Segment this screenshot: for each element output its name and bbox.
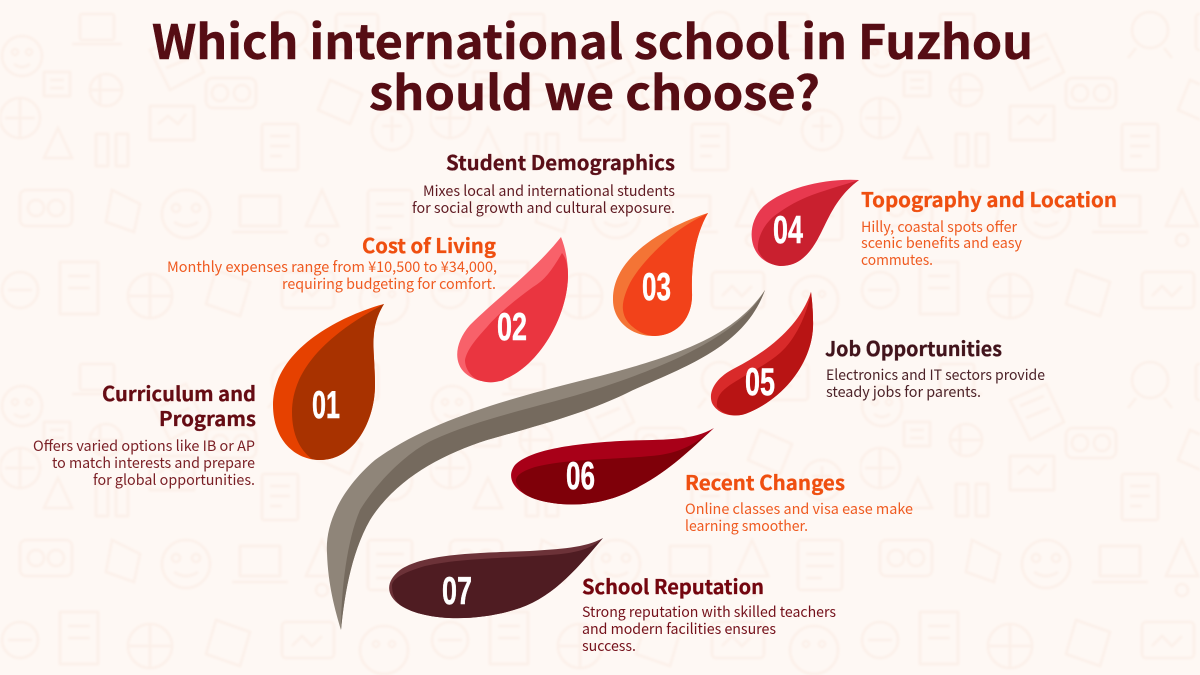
drop 04	[752, 180, 859, 266]
text: Curriculum and Programs: Programs	[159, 403, 256, 432]
drop 03: 03	[642, 266, 671, 309]
text: Cost of Living: Monthly expenses range from ¥10,500 to ¥34,000,	[167, 256, 497, 277]
text: Cost of Living: requiring budgeting for comfort.	[282, 273, 496, 294]
title: Which international school in Fuzhou	[152, 4, 1033, 73]
text: Job Opportunities: steady jobs for parents.	[826, 381, 981, 402]
text: Job Opportunities: Electronics and IT sectors provide	[826, 364, 1045, 385]
text: Topography and Location: commutes.	[861, 249, 933, 270]
text: Curriculum and Programs	[33, 378, 256, 490]
text: Student Demographics	[412, 147, 675, 218]
text: Topography and Location	[861, 184, 1117, 270]
drop 06	[511, 428, 714, 505]
text: Cost of Living: Cost of Living	[362, 230, 496, 259]
central swoosh arrow	[327, 290, 765, 630]
text: Curriculum and Programs: Offers varied options like IB or AP	[33, 435, 255, 456]
text: School Reputation: School Reputation	[582, 571, 764, 600]
text: Curriculum and Programs: Curriculum and	[102, 378, 256, 407]
text: Cost of Living	[167, 230, 497, 294]
drop 07	[389, 538, 603, 618]
text: Recent Changes: Recent Changes	[685, 467, 845, 496]
drop 01: 01	[312, 384, 340, 427]
text: School Reputation: success.	[582, 635, 636, 656]
text: Curriculum and Programs: for global opportunities.	[93, 469, 255, 490]
text: Curriculum and Programs: to match interests and prepare	[52, 452, 255, 473]
text: Topography and Location: Hilly, coastal spots offer	[861, 216, 1017, 237]
text: Student Demographics: for social growth and cultural exposure.	[412, 197, 675, 218]
text: Job Opportunities	[825, 333, 1045, 402]
drop 04: 04	[773, 209, 803, 252]
drop 01	[273, 304, 384, 460]
title: should we choose?	[369, 55, 820, 124]
drop 03	[613, 213, 708, 336]
drop 05	[711, 292, 813, 415]
drop 05: 05	[745, 361, 775, 404]
text: Topography and Location: Topography and Location	[861, 184, 1117, 213]
drop 06: 06	[566, 455, 595, 498]
drop 02	[457, 237, 568, 382]
drop 07: 07	[442, 570, 472, 613]
text: Topography and Location: scenic benefits and easy	[861, 232, 1022, 253]
text: Recent Changes: learning smoother.	[685, 515, 808, 536]
text: Recent Changes: Online classes and visa ease make	[685, 498, 913, 519]
text: Job Opportunities: Job Opportunities	[825, 333, 1002, 362]
title	[152, 4, 1033, 124]
text: Student Demographics: Student Demographics	[446, 147, 675, 176]
text: School Reputation	[582, 571, 836, 656]
drop 02: 02	[497, 306, 527, 349]
text: Student Demographics: Mixes local and international students	[423, 180, 675, 201]
text: School Reputation: and modern facilities ensures	[582, 618, 776, 639]
text: Recent Changes	[685, 467, 913, 536]
text: School Reputation: Strong reputation with skilled teachers	[582, 601, 836, 622]
